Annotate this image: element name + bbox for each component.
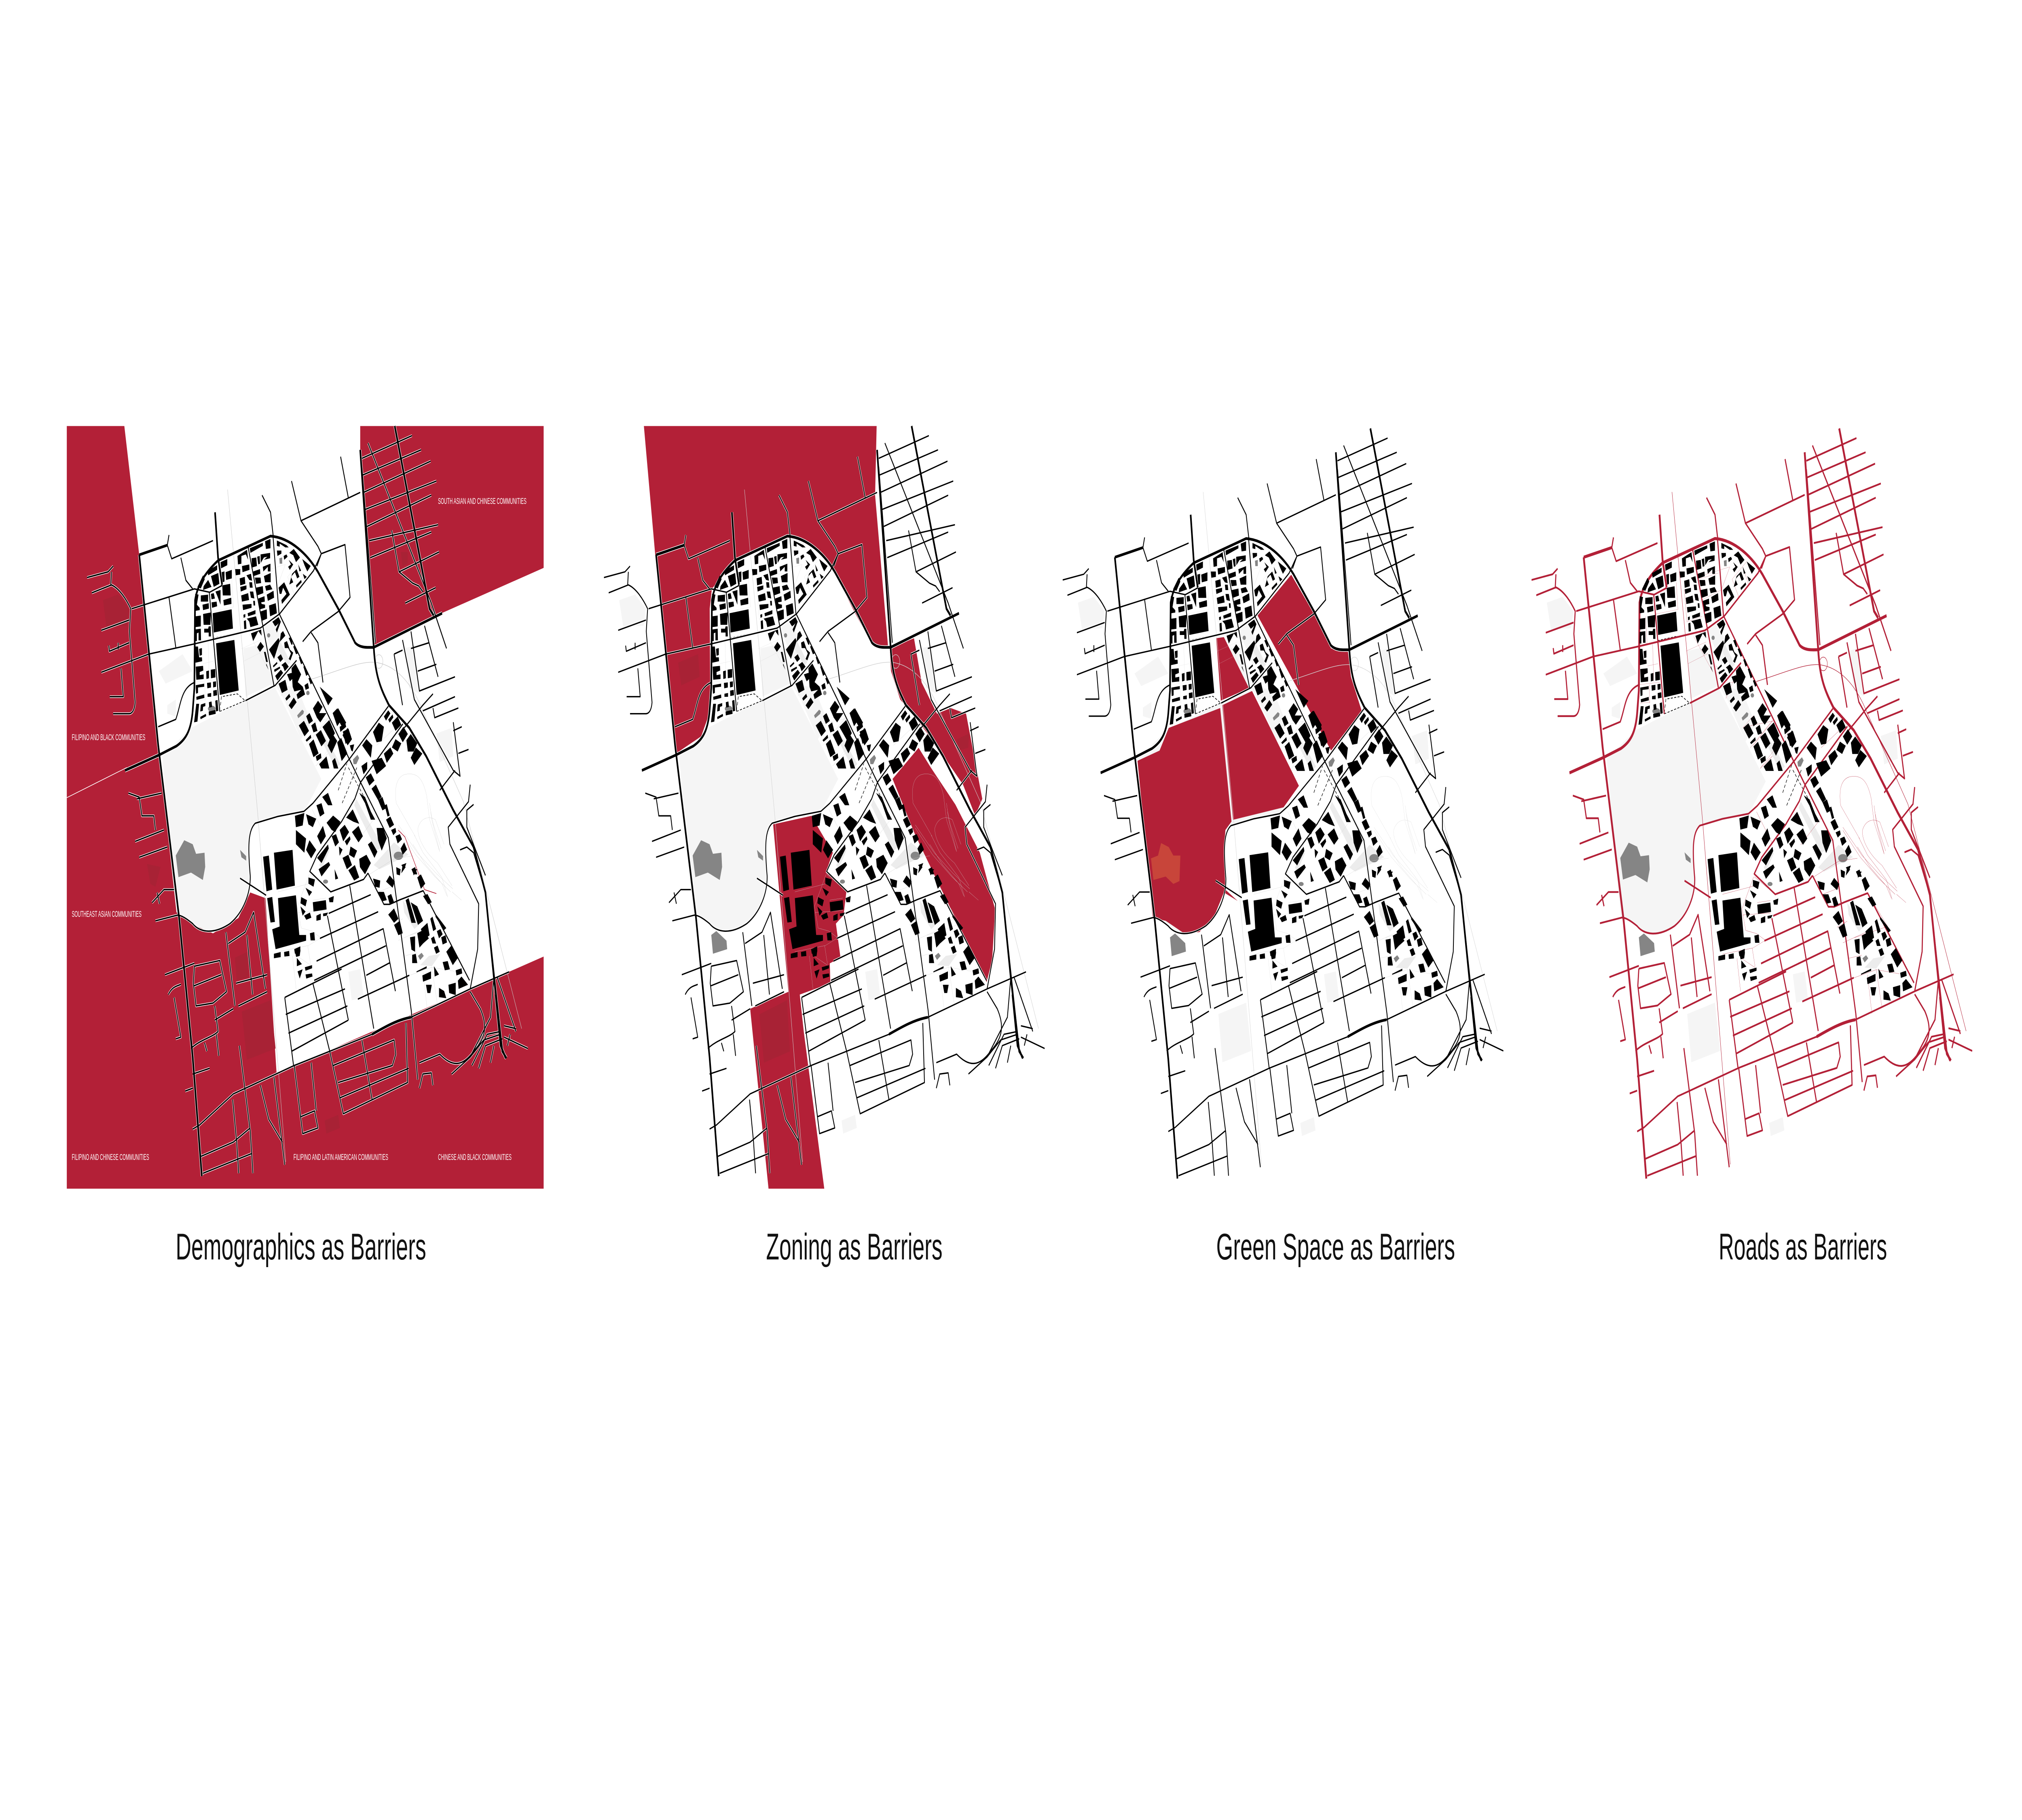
roads map parks layer xyxy=(1547,560,1898,1136)
title: green space: Green Space as Barriers xyxy=(1216,1226,1455,1268)
arterial roads xyxy=(125,426,506,1176)
map: roads as barriers xyxy=(1531,428,1972,1179)
map: zoning as barriers xyxy=(604,426,1045,1189)
dashed paths xyxy=(213,634,364,804)
road casing xyxy=(87,436,528,1173)
community labels: FILIPINO AND CHINESE COMMUNITIES xyxy=(72,1152,149,1162)
zoning parks layer xyxy=(619,557,970,1134)
parks and ponds layer xyxy=(102,557,453,1134)
title: zoning: Zoning as Barriers xyxy=(766,1226,943,1268)
zoning barrier zones xyxy=(644,426,995,1189)
roads map dashed paths xyxy=(1658,636,1808,807)
green space road network and buildings xyxy=(1063,428,1503,1179)
community labels: FILIPINO AND LATIN AMERICAN COMMUNITIES xyxy=(294,1152,388,1162)
community labels: SOUTH ASIAN AND CHINESE COMMUNITIES xyxy=(438,496,527,506)
roads map thin lines xyxy=(1640,492,1966,1164)
roads map arterials xyxy=(1569,428,1951,1179)
thin rail and track lines xyxy=(195,489,522,1162)
track edge highlight xyxy=(398,830,436,893)
streets xyxy=(87,436,528,1173)
green space barrier zones xyxy=(1138,575,1362,933)
roads map buildings xyxy=(1639,541,1912,1001)
green space parks layer xyxy=(1078,560,1429,1136)
community labels: FILIPINO AND BLACK COMMUNITIES xyxy=(72,732,145,742)
title: demographics: Demographics as Barriers xyxy=(176,1226,426,1268)
community labels xyxy=(72,496,527,1162)
arterial casing xyxy=(125,426,506,1176)
demographic barrier zones xyxy=(67,426,544,1189)
map: green space as barriers xyxy=(1063,428,1503,1179)
darker park patches under zones xyxy=(103,552,408,1134)
pond highlighted xyxy=(1151,843,1180,884)
boundary line to west xyxy=(67,768,127,798)
building footprints xyxy=(194,539,468,998)
roads map streets xyxy=(1531,438,1972,1176)
community labels: SOUTHEAST ASIAN COMMUNITIES xyxy=(72,909,142,919)
community labels: CHINESE AND BLACK COMMUNITIES xyxy=(438,1152,512,1162)
map: demographics as barriers xyxy=(67,426,544,1189)
title: roads: Roads as Barriers xyxy=(1719,1226,1887,1268)
zoning road network and buildings xyxy=(604,426,1045,1176)
